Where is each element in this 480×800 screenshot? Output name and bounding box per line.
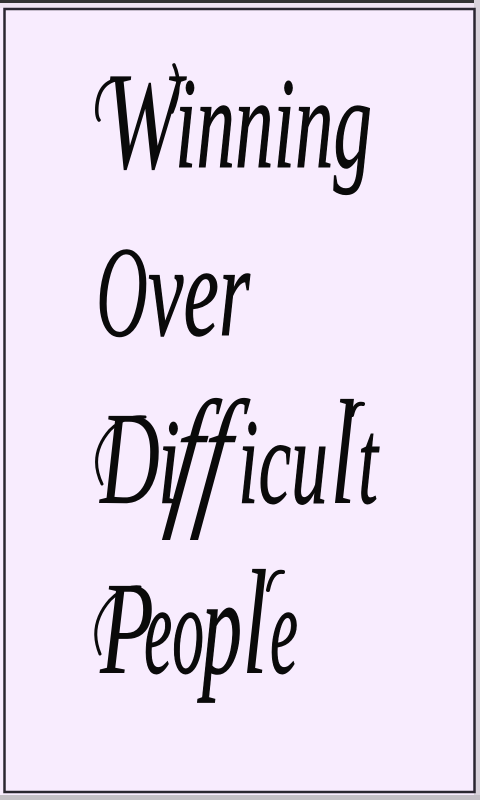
title bbox=[96, 44, 380, 706]
title line: Difficult: t bbox=[358, 395, 380, 530]
title line: People: eo bbox=[144, 561, 204, 701]
title line: People: P bbox=[99, 554, 154, 702]
title line: Winning: W bbox=[104, 44, 187, 199]
title line: People: l bbox=[242, 540, 268, 706]
title line: Difficult: l bbox=[330, 370, 356, 536]
title line: Difficult bbox=[97, 369, 380, 541]
title line: People: p bbox=[197, 550, 242, 703]
title line: Difficult: icu bbox=[238, 395, 328, 530]
title line: Over bbox=[96, 220, 250, 365]
title line: Winning bbox=[97, 44, 372, 199]
title line: Difficult: i bbox=[158, 395, 180, 530]
title line: People bbox=[96, 540, 298, 706]
title line: Over: ver bbox=[148, 220, 250, 364]
title line: Difficult: ff bbox=[161, 369, 256, 541]
title line: Difficult: D bbox=[99, 384, 160, 532]
title line: Over: O bbox=[96, 220, 148, 365]
title: e bbox=[270, 561, 298, 701]
